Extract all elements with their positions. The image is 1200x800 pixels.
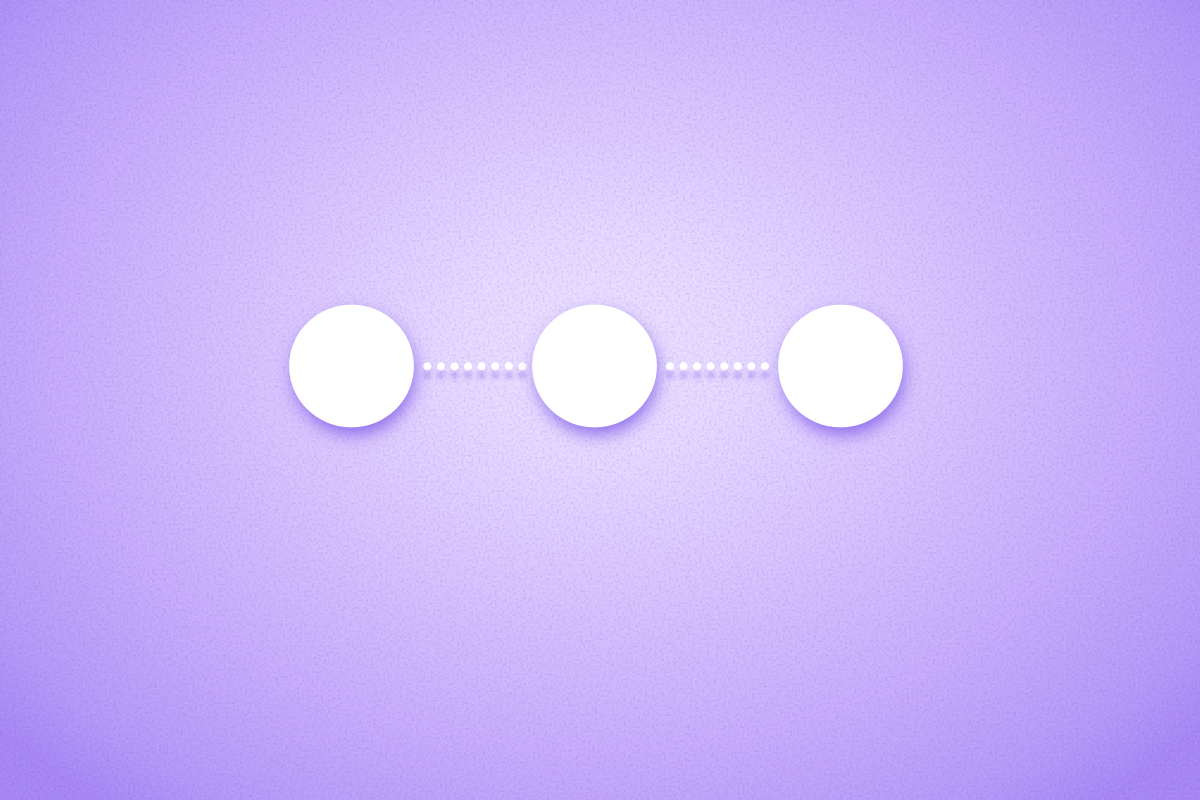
- connector: dotted line left: [423, 362, 526, 379]
- node 3: [778, 305, 903, 434]
- connector: dotted line right: [666, 362, 769, 379]
- node 2: [532, 305, 657, 434]
- node 1: [289, 305, 414, 434]
